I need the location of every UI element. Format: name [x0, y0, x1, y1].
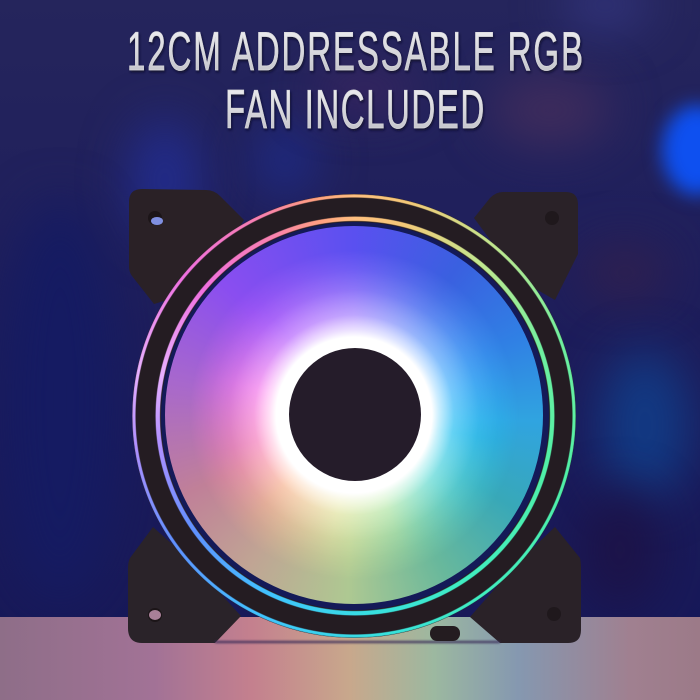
- inner RGB ring: [155, 216, 555, 616]
- outer RGB ring: [132, 194, 576, 638]
- mounting holes: [148, 211, 561, 622]
- fan cable: [430, 626, 460, 641]
- corner mount: top left: [129, 189, 244, 304]
- title: 12CM ADDRESSABLE RGB: [127, 20, 583, 82]
- title: [127, 20, 584, 140]
- rim shadow: [161, 222, 549, 610]
- fan body disc: [132, 194, 576, 638]
- central hub: [289, 348, 421, 481]
- corner mount: top right: [474, 192, 578, 300]
- table contact shadow: [215, 641, 500, 643]
- fan blades glowing rainbow: [165, 226, 543, 604]
- corner mount: bottom left: [128, 527, 241, 643]
- table surface: [0, 617, 700, 700]
- title: FAN INCLUDED: [225, 78, 484, 140]
- corner mount: bottom right: [470, 527, 581, 643]
